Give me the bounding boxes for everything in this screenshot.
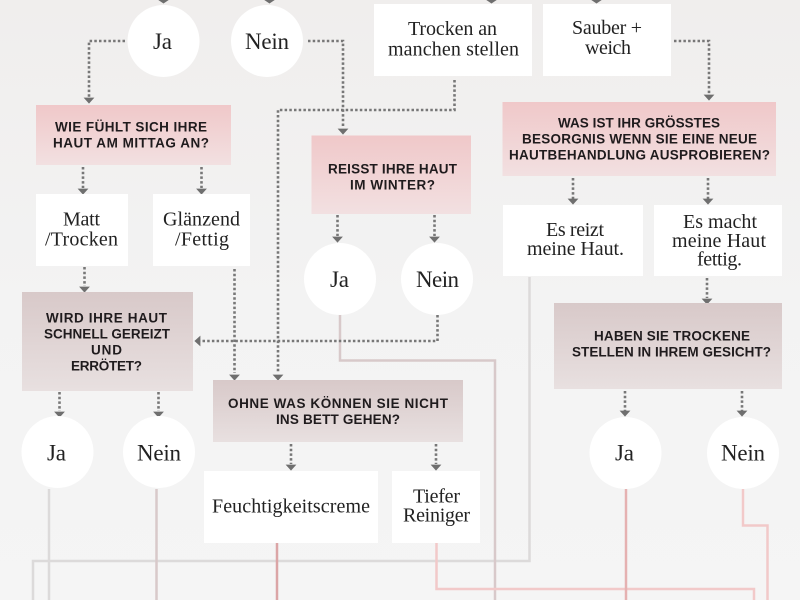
option box: Trocken an manchen stellen: manchen stellen: [388, 38, 519, 60]
answer circle: Ja (top): [128, 5, 200, 77]
answer circle: Ja (Winter): Ja: [330, 267, 349, 292]
answer circle: Ja (gereizt): [22, 416, 94, 488]
answer circle: Ja (Winter): [304, 243, 376, 315]
option box: Es macht meine Haut fettig: Es macht: [683, 211, 757, 233]
option box: Es macht meine Haut fettig: meine Haut: [672, 230, 766, 252]
option box: Tiefer Reiniger: Reiniger: [403, 505, 470, 527]
answer circle: Nein (top): [231, 5, 303, 77]
question: Haben Sie trockene Stellen in Ihrem Gesicht?: [554, 303, 782, 389]
question: Wird Ihre Haut schnell gereizt und errötet?: [22, 292, 193, 391]
option box: Es macht meine Haut fettig: [654, 205, 782, 276]
answer circle: Ja (top): Ja: [153, 29, 172, 54]
option box: Tiefer Reiniger: [392, 471, 480, 543]
option box: Matt / Trocken: [36, 194, 128, 266]
question: Reisst Ihre Haut im Winter?: REISST IHRE HAUT: [328, 161, 458, 176]
answer circle: Nein (gereizt): [123, 416, 195, 488]
option box: Sauber + weich: [543, 4, 671, 76]
answer circle: Nein (gereizt): Nein: [137, 441, 182, 466]
answer circle: Nein (top): Nein: [245, 29, 290, 54]
question: Reisst Ihre Haut im Winter?: IM WINTER?: [350, 177, 435, 192]
option box: Glänzend / Fettig: Glänzend: [163, 209, 240, 231]
option box: Es reizt meine Haut: [503, 205, 643, 276]
option box: Glänzend / Fettig: /Fettig: [175, 229, 229, 251]
question: Ohne was können Sie nicht ins Bett gehen?: [213, 380, 463, 442]
question: Ohne was können Sie nicht ins Bett gehen?: INS BETT GEHEN?: [276, 412, 400, 427]
option box: Matt / Trocken: Matt: [63, 209, 100, 231]
answer circle: Ja (gereizt): Ja: [47, 441, 66, 466]
option box: Feuchtigkeitscreme: Feuchtigkeitscreme: [212, 496, 370, 518]
dotted connector arrows: [55, 0, 746, 470]
question: Wird Ihre Haut schnell gereizt und errötet?: WIRD IHRE HAUT: [46, 311, 168, 326]
answer circle: Nein (Winter): [401, 243, 473, 315]
answer circle: Nein (Gesicht): [707, 417, 779, 489]
answer circle: Nein (Winter): Nein: [416, 267, 460, 292]
question: Reisst Ihre Haut im Winter?: [312, 136, 471, 214]
option box: Es reizt meine Haut: meine Haut.: [527, 238, 624, 260]
question: Wird Ihre Haut schnell gereizt und errötet?: UND: [91, 343, 122, 358]
question: Wie fühlt sich Ihre Haut am Mittag an?: [36, 105, 231, 165]
option box: Matt / Trocken: /Trocken: [45, 229, 118, 251]
option box: Es macht meine Haut fettig: fettig.: [697, 249, 742, 271]
option box: Trocken an manchen stellen: [374, 4, 532, 76]
question: Haben Sie trockene Stellen in Ihrem Gesicht?: HABEN SIE TROCKENE: [594, 329, 750, 344]
question: Wird Ihre Haut schnell gereizt und errötet?: SCHNELL GEREIZT: [44, 327, 171, 342]
solid outcome lines: [33, 277, 768, 600]
question: Ohne was können Sie nicht ins Bett gehen?: OHNE WAS KÖNNEN SIE NICHT: [228, 396, 449, 411]
question: Was ist Ihr grösstes Besorgnis: WAS IST IHR GRÖSSTES: [558, 115, 720, 130]
question: Was ist Ihr grösstes Besorgnis: [502, 102, 776, 176]
question: Haben Sie trockene Stellen in Ihrem Gesicht?: STELLEN IN IHREM GESICHT?: [572, 345, 771, 360]
option box: Trocken an manchen stellen: Trocken an: [408, 18, 497, 40]
question: Wie fühlt sich Ihre Haut am Mittag an?: HAUT AM MITTAG AN?: [53, 135, 209, 150]
question: Wie fühlt sich Ihre Haut am Mittag an?: WIE FÜHLT SICH IHRE: [55, 120, 207, 135]
question: Was ist Ihr grösstes Besorgnis: HAUTBEHANDLUNG AUSPROBIEREN?: [509, 147, 770, 162]
option box: Sauber + weich: Sauber +: [572, 17, 642, 39]
answer circle: Ja (Gesicht): [590, 417, 662, 489]
answer circle: Nein (Gesicht): Nein: [721, 441, 766, 466]
option box: Feuchtigkeitscreme: [204, 471, 378, 543]
option box: Tiefer Reiniger: Tiefer: [413, 486, 460, 508]
option box: Glänzend / Fettig: [153, 194, 250, 266]
question: Was ist Ihr grösstes Besorgnis: BESORGNIS WENN SIE EINE NEUE: [522, 131, 757, 146]
option box: Sauber + weich: weich: [585, 37, 631, 59]
option box: Es reizt meine Haut: Es reizt: [546, 219, 604, 241]
answer circle: Ja (Gesicht): Ja: [615, 441, 634, 466]
question: Wird Ihre Haut schnell gereizt und errötet?: ERRÖTET?: [71, 359, 142, 374]
